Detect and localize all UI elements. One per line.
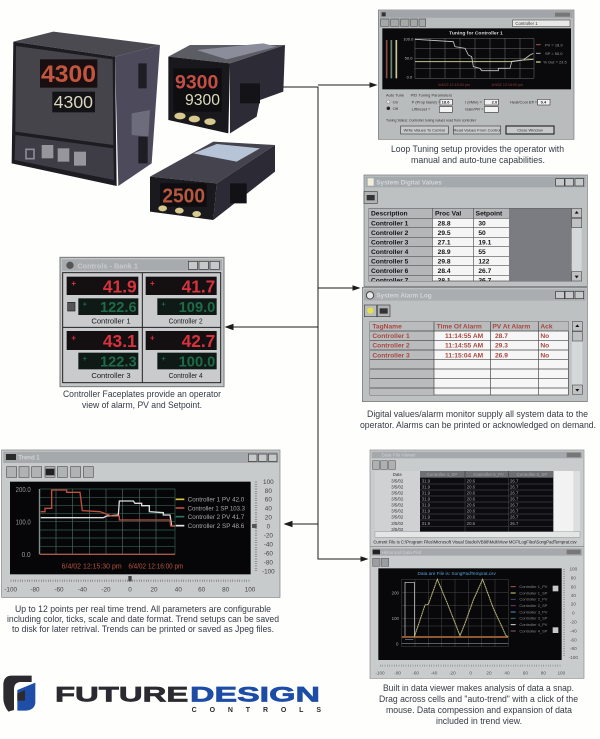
caption: loop tuning: manual and auto-tune capabilities.	[411, 155, 545, 165]
panel: system alarm log window: No	[540, 352, 549, 359]
data viewer legend: Controller 3_SP	[519, 616, 548, 621]
panel: loop tuning window: Controller 1	[515, 21, 538, 26]
panel: system digital values window: 28.4	[438, 268, 451, 275]
right scale: 20	[265, 515, 272, 522]
data viewer legend: Controller 1_SP	[519, 590, 548, 595]
panel: system digital values window: 30	[478, 220, 486, 227]
panel: controller faceplates window: 109.0	[179, 300, 215, 316]
panel: data viewer table window: 31.9	[422, 503, 431, 508]
panel: loop tuning window: I (I/Min) =	[465, 99, 483, 104]
panel: data viewer trend window: -60	[570, 637, 577, 642]
panel: loop tuning window: 6/4/02 12:16:00 pm	[492, 83, 523, 87]
panel: loop tuning window: Read Values From Control	[454, 127, 501, 132]
panel: controller faceplates window: +	[150, 334, 155, 343]
panel: controller faceplates window: +	[71, 279, 76, 288]
panel: data viewer trend window: 40	[571, 593, 576, 598]
panel: data viewer trend window: Data are File is: SongPadTemprat.csv	[417, 571, 497, 576]
data viewer legend: Controller 4_PV	[519, 622, 548, 627]
panel: controller faceplates window: Controls - Bank 1	[77, 261, 138, 270]
panel: data viewer trend window: -40	[570, 628, 577, 633]
panel: controller faceplates window: +	[150, 279, 155, 288]
panel: data viewer table window: Controller 4_SP	[427, 472, 457, 477]
panel: system digital values window: 26.7	[478, 277, 492, 284]
caption: real time trend: including color, ticks, scale and date format. Trend setups can be saved	[7, 614, 279, 624]
right scale: 40	[265, 506, 272, 513]
panel: loop tuning window: 0.4	[541, 100, 547, 105]
panel: data viewer table window: 26.7	[510, 509, 519, 514]
bottom scale: -20	[101, 586, 111, 593]
right scale: -100	[262, 569, 275, 576]
panel: system alarm log window: PV At Alarm	[492, 323, 530, 330]
caption: data viewer: Built in data viewer makes analysis of data a snap.	[383, 683, 574, 693]
bottom scale	[4, 576, 256, 593]
panel: real time trend window: 6/4/02 12:16:00 pm	[128, 563, 183, 570]
logo: Future Design Controls: FUTURE	[55, 684, 188, 707]
data viewer legend	[511, 584, 548, 633]
panel: data viewer table window: 31.9	[422, 491, 431, 496]
panel: data viewer trend window: -60	[412, 670, 419, 675]
panel: data viewer table window: 31.9	[422, 479, 431, 484]
panel: loop tuning window: Off	[393, 106, 399, 111]
panel: system digital values window: 19.1	[478, 239, 492, 246]
panel: system digital values window	[364, 175, 587, 287]
panel: data viewer trend window: 20	[486, 670, 492, 675]
right scale: -60	[264, 551, 273, 558]
panel: system digital values window: Controller 7	[371, 277, 409, 284]
panel: data viewer table window: Current File is C:\Program Files\Microsoft Visual Studio\VB98\MultiView MCF\LogFiles\SongPadTemprat.csv	[373, 539, 577, 544]
panel: data viewer table window: 3/5/02	[391, 509, 404, 514]
panel: loop tuning window: 18.6	[442, 100, 450, 105]
panel: loop tuning window: Tuning Status: Controller tuning values read from controller	[386, 117, 477, 122]
panel: loop tuning window: Auto Tune	[386, 92, 405, 97]
panel: real time trend window	[2, 450, 280, 597]
product photo: temperature controllers	[12, 32, 285, 220]
panel: data viewer trend window: 60	[571, 584, 576, 589]
panel: loop tuning window: Tuning for Controller 1	[449, 31, 503, 37]
panel: system alarm log window: Controller 1	[372, 333, 410, 340]
panel: system digital values window: Controller 3	[371, 239, 409, 246]
panel: data viewer trend window: 200	[392, 590, 399, 595]
large controller	[12, 32, 160, 186]
panel: system alarm log window: 11:15:04 AM	[445, 352, 484, 359]
right scale	[252, 479, 275, 576]
panel: system digital values window: 29.5	[438, 230, 451, 237]
panel: real time trend window: 6/4/02 12:15:30 pm	[62, 563, 122, 570]
panel: data viewer trend window: 20	[571, 602, 576, 607]
panel: system digital values window: 122	[478, 258, 490, 265]
bottom scale: -100	[4, 586, 17, 593]
data viewer legend: Controller 1_PV	[519, 584, 548, 589]
caption: real time trend: to disk for later retrival. Trends can be printed or saved as Jpeg files.	[12, 624, 274, 634]
small vertical controller	[168, 43, 285, 133]
panel: system digital values window: 29.8	[438, 258, 451, 265]
panel: data viewer table window: 3/5/02	[391, 515, 404, 520]
panel: loop tuning window: SP = 50.0	[545, 51, 563, 56]
panel: data viewer table window: 26.7	[510, 521, 519, 526]
right scale: 0	[267, 523, 271, 530]
small vertical controller: 9300	[185, 92, 220, 109]
panel: data viewer table window: 3/5/02	[391, 479, 404, 484]
panel: loop tuning window: Close Window	[517, 127, 543, 132]
panel: data viewer trend window: -80	[394, 670, 401, 675]
caption: data viewer: mouse. Data compession and expansion of data	[386, 705, 573, 715]
panel: system alarm log window: Controller 2	[372, 343, 410, 350]
caption: data viewer: Drag across cells and "auto-trend" with a click of the	[379, 694, 578, 704]
panel: system alarm log window: No	[540, 333, 549, 340]
panel: loop tuning window: 50.0	[405, 56, 413, 61]
data viewer legend: Controller 3_PV	[519, 609, 548, 614]
panel: data viewer table window	[370, 450, 584, 547]
panel: controller faceplates window: 42.7	[182, 331, 215, 351]
panel: loop tuning window	[378, 10, 574, 139]
data viewer legend: Controller 4_SP	[519, 628, 548, 633]
panel: data viewer table window: 31.9	[422, 497, 431, 502]
panel: controller faceplates window: 41.7	[182, 276, 215, 296]
panel: data viewer trend window: 80	[571, 575, 576, 580]
panel: data viewer table window: 31.9	[422, 515, 431, 520]
panel: data viewer table window: 20.6	[467, 479, 476, 484]
panel: data viewer trend window: -100	[569, 655, 578, 660]
panel: system digital values window: 28.1	[438, 277, 451, 284]
panel: data viewer table window: 26.7	[510, 485, 519, 490]
bottom scale: 60	[198, 586, 206, 593]
panel: system digital values window: 28.8	[438, 220, 451, 227]
panel: loop tuning window: 100.0	[403, 37, 414, 42]
panel: system alarm log window: No	[540, 343, 549, 350]
panel: data viewer trend window: 100	[392, 616, 399, 621]
panel: data viewer table window: 20.6	[467, 503, 476, 508]
panel: data viewer trend window: -20	[449, 670, 456, 675]
panel: data viewer table window: 31.9	[422, 521, 431, 526]
panel: controller faceplates window: Controller 3	[91, 373, 131, 380]
caption: data viewer	[379, 683, 578, 726]
panel: system alarm log window: 11:14:55 AM	[445, 343, 484, 350]
trend legend: Controller 2 SP 48.6	[188, 523, 245, 530]
caption: loop tuning	[391, 144, 564, 165]
caption: digital values and alarm monitor: Digital values/alarm monitor supply all system data to the	[367, 409, 588, 419]
panel: loop tuning window: 0.0	[407, 75, 413, 80]
caption: real time trend	[7, 604, 279, 634]
caption: loop tuning: Loop Tuning setup provides the operator with	[391, 144, 564, 154]
panel: controller faceplates window: 122.3	[100, 354, 137, 370]
large controller: 4300	[54, 92, 93, 112]
panel: data viewer table window: 31.9	[422, 509, 431, 514]
right scale: 80	[265, 488, 272, 495]
bottom scale: 80	[222, 586, 230, 593]
right scale: -20	[264, 532, 273, 539]
right scale: -40	[264, 541, 273, 548]
panel: system alarm log window: Ack	[540, 323, 553, 330]
panel: loop tuning window: 2.0	[492, 100, 498, 105]
panel: data viewer table window: 3/5/02	[391, 491, 404, 496]
trend toolbar	[7, 467, 93, 477]
panel: data viewer table window: 20.6	[467, 491, 476, 496]
bottom scale: -60	[54, 586, 64, 593]
panel: controller faceplates window: +	[161, 354, 166, 363]
panel: loop tuning window: Write Values To Control	[404, 127, 445, 132]
panel: loop tuning window: On	[393, 99, 398, 104]
right scale: -80	[264, 560, 273, 567]
panel: data viewer table window: 20.6	[467, 515, 476, 520]
panel: loop tuning window: PV = 18.9	[545, 42, 563, 47]
logo: Future Design Controls: CONTROLS	[192, 707, 321, 714]
trend legend: Controller 2 PV 41.7	[188, 514, 245, 521]
connector arrows	[226, 83, 376, 561]
panel: controller faceplates window: +	[71, 334, 76, 343]
panel: data viewer table window: 20.6	[467, 497, 476, 502]
panel: data viewer trend window: 0	[469, 670, 472, 675]
panel: loop tuning window: PID Tuning Parameters	[411, 92, 452, 97]
panel: data viewer table window: Controller 5_SP	[517, 472, 547, 477]
trend legend: Controller 1 PV 42.0	[188, 497, 245, 504]
panel: data viewer table window: Controller 5_PV	[473, 472, 504, 477]
panel: controller faceplates window: Controller 2	[169, 318, 203, 325]
panel: data viewer table window: 3/5/02	[391, 497, 404, 502]
logo: Future Design Controls	[3, 676, 321, 714]
panel: real time trend window: 200.0	[16, 485, 31, 494]
panel: data viewer trend window: -80	[570, 646, 577, 651]
panel: data viewer trend window: -20	[570, 619, 577, 624]
panel: controller faceplates window: 43.1	[103, 331, 137, 351]
panel: system alarm log window: 28.7	[495, 333, 508, 340]
caption: controller faceplates	[63, 389, 221, 410]
panel: loop tuning window: Heat/Cool Eff =	[510, 99, 538, 104]
panel: controller faceplates window: +	[83, 300, 87, 309]
panel: loop tuning window: 6/4/02 12:15:30 pm	[438, 83, 470, 87]
panel: data viewer trend window: -100	[375, 670, 385, 675]
panel: system digital values window: Proc Val	[435, 211, 461, 218]
bottom scale: 100	[245, 586, 256, 593]
panel: loop tuning window: P (Prop Band) =	[412, 99, 441, 104]
panel: data viewer trend window: 0	[572, 610, 575, 615]
bottom scale: -40	[78, 586, 87, 593]
data viewer legend: Controller 2_PV	[519, 597, 548, 602]
bottom scale: 40	[175, 586, 182, 593]
panel: system alarm log window	[362, 287, 587, 402]
panel: data viewer table window: 31.9	[422, 485, 431, 490]
small horizontal controller: 2500	[162, 186, 205, 208]
panel: data viewer table window: Date	[393, 472, 402, 477]
panel: controller faceplates window: +	[83, 354, 87, 363]
panel: loop tuning window: Lift/reset =	[412, 107, 431, 112]
data viewer legend: Controller 2_SP	[519, 603, 548, 608]
caption: controller faceplates: Controller Faceplates provide an operator	[63, 389, 221, 399]
panel: data viewer table window: 26.7	[510, 479, 519, 484]
panel: data viewer table window: 3/5/02	[391, 521, 404, 526]
caption: real time trend: Up to 12 points per real time trend. All parameters are configurable	[15, 604, 271, 614]
panel: system digital values window: Controller 2	[371, 230, 409, 237]
trend legend: Controller 1 SP 103.3	[188, 505, 245, 512]
caption: digital values and alarm monitor	[360, 409, 596, 430]
panel: data viewer trend window: 100	[569, 567, 578, 572]
bottom scale: -80	[30, 586, 40, 593]
panel: data viewer table window: 3/5/02	[391, 527, 404, 532]
panel: data viewer table window: 26.7	[510, 515, 519, 520]
panel: system alarm log window: 26.9	[495, 352, 508, 359]
trend chart lines	[39, 489, 175, 554]
panel: real time trend window: 0.0	[22, 550, 31, 559]
bottom scale: 0	[128, 586, 132, 593]
panel: controller faceplates window: Controller 1	[91, 318, 131, 325]
panel: data viewer table window: 26.7	[510, 497, 519, 502]
panel: system digital values window: Description	[371, 211, 408, 218]
panel: data viewer trend window: 40	[504, 670, 510, 675]
panel: loop tuning window: Gain/PR =	[465, 107, 484, 112]
panel: data viewer table window: 26.7	[510, 503, 519, 508]
panel: data viewer table window: 26.7	[510, 491, 519, 496]
panel: data viewer trend window: -40	[431, 670, 438, 675]
panel: controller faceplates window: 41.9	[103, 276, 137, 296]
panel: system digital values window: Setpoint	[476, 211, 503, 218]
panel: system digital values window: Controller 4	[371, 249, 409, 256]
panel: system alarm log window: TagName	[372, 323, 402, 330]
panel: data viewer trend window: 80	[541, 670, 546, 675]
panel: loop tuning window: % Out = 23.5	[543, 60, 567, 65]
panel: controller faceplates window: 122.6	[100, 300, 137, 316]
panel: system digital values window: Controller 1	[371, 220, 409, 227]
panel: data viewer table window: 3/5/02	[391, 503, 404, 508]
panel: data viewer trend window: Historical Data Plot	[382, 550, 422, 555]
panel: system alarm log window: 29.3	[495, 343, 508, 350]
panel: system digital values window: 27.1	[438, 239, 451, 246]
panel: system alarm log window: Controller 3	[372, 352, 410, 359]
trend legend	[176, 497, 245, 530]
small horizontal controller	[150, 142, 275, 220]
panel: system digital values window: 55	[478, 249, 486, 256]
panel: data viewer table window: 3/5/02	[391, 485, 404, 490]
panel: controller faceplates window: 100.0	[179, 354, 215, 370]
panel: system digital values window: System Digital Values	[376, 180, 442, 187]
panel: data viewer trend window: 0	[396, 641, 399, 646]
icon: logo mark	[3, 676, 35, 712]
panel: data viewer table window: 20.6	[467, 521, 476, 526]
panel: system alarm log window: 11:14:55 AM	[445, 333, 484, 340]
logo: Future Design Controls: DESIGN	[190, 684, 320, 707]
caption: data viewer: included in trend view.	[436, 716, 522, 726]
caption: controller faceplates: view of alarm, PV and Setpoint.	[82, 400, 202, 410]
panel: data viewer trend window: 100	[557, 670, 566, 675]
right scale: 100	[263, 479, 274, 486]
panel: real time trend window: Trend 1	[18, 455, 40, 461]
panel: data viewer table window: Data File Viewer	[382, 453, 416, 458]
bottom scale: 20	[150, 586, 158, 593]
panel: system digital values window: 50	[478, 230, 486, 237]
panel: system alarm log window: System Alarm Log	[376, 293, 432, 300]
panel: system alarm log window: Time Of Alarm	[437, 323, 482, 330]
panel: data viewer table window: 20.6	[467, 509, 476, 514]
panel: controller faceplates window: +	[161, 300, 166, 309]
panel: controller faceplates window	[60, 257, 224, 387]
panel: data viewer trend window: 60	[523, 670, 528, 675]
panel: controller faceplates window: Controller 4	[169, 373, 203, 380]
panel: data viewer trend window	[370, 547, 584, 678]
right scale: 60	[265, 497, 272, 504]
large controller: 4300	[41, 61, 96, 88]
panel: system digital values window: Controller 6	[371, 268, 409, 275]
small vertical controller: 9300	[175, 72, 218, 93]
panel: real time trend window: 100.0	[16, 517, 31, 526]
panel: system digital values window: Controller 5	[371, 258, 409, 265]
panel: data viewer table window: 20.6	[467, 485, 476, 490]
panel: system digital values window: 28.9	[438, 249, 451, 256]
panel: system digital values window: 26.7	[478, 268, 492, 275]
